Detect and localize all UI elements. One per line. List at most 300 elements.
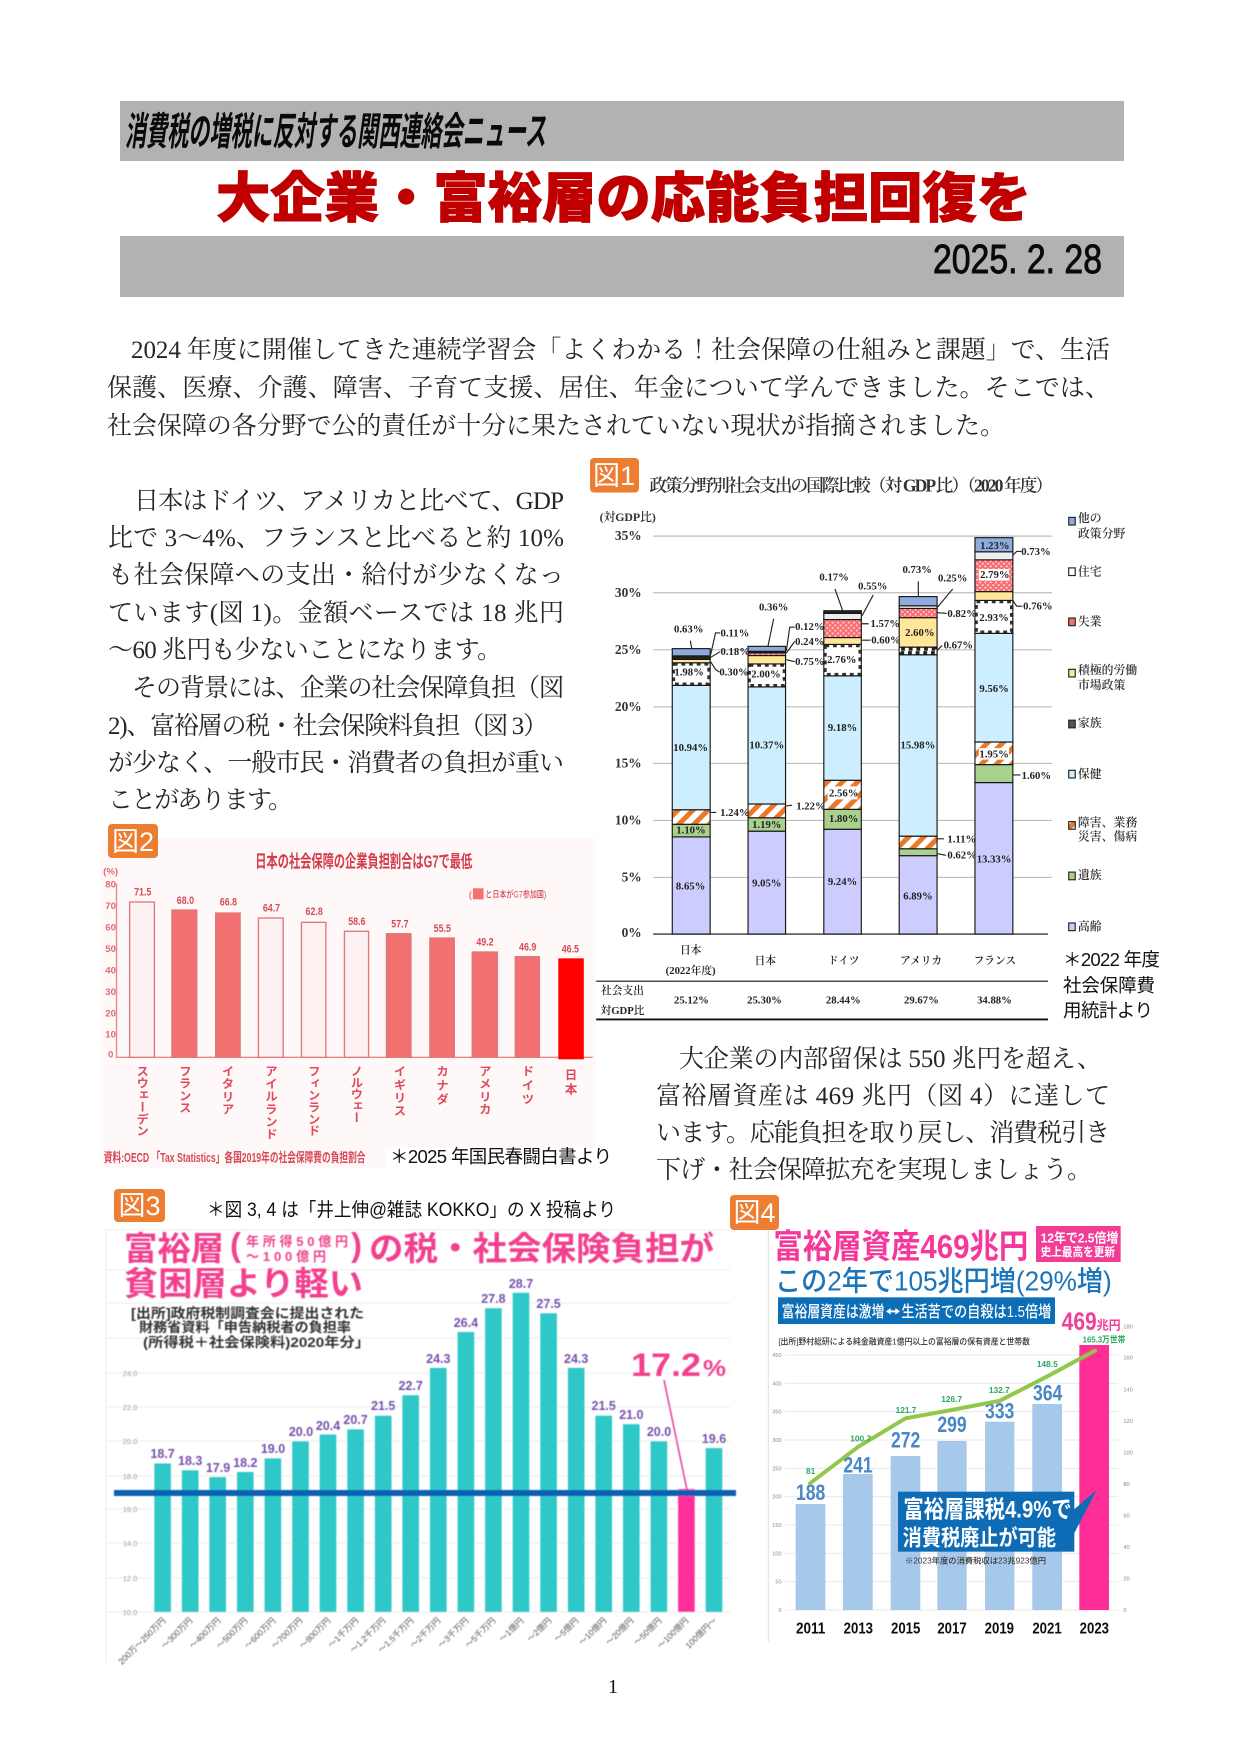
legend: 失業 xyxy=(1078,615,1102,629)
bar: Japan 2022 xyxy=(672,624,750,934)
grid and axes: 200 xyxy=(772,1495,782,1501)
bar values: 57.7 xyxy=(391,918,409,930)
bar values: 62.8 xyxy=(306,906,323,918)
bar: France: 2.93% xyxy=(979,612,1009,624)
callout: 富裕層課税4.9%で xyxy=(903,1496,1072,1523)
bar: Germany: 0.55% xyxy=(858,580,888,592)
x axis labels: 100億円〜 xyxy=(683,1615,719,1650)
bar values: 24.3 xyxy=(564,1352,588,1366)
country labels: フィンランド xyxy=(306,1065,320,1137)
chart grid xyxy=(106,1230,730,1663)
figure 2 source note: ＊2025 年国民春闘白書より xyxy=(390,1146,612,1167)
bar values: 20.0 xyxy=(647,1425,671,1439)
bars xyxy=(154,1293,722,1612)
bar: Germany: 9.24% xyxy=(828,876,857,888)
grid and axes: 450 xyxy=(772,1353,782,1359)
grid and axes: 400 xyxy=(772,1381,782,1387)
figure 1 title: 政策分野別社会支出の国際比較（対 GDP 比）（2020 年度） xyxy=(649,476,1053,496)
intro paragraph: 保護、医療、介護、障害、子育て支援、居住、年金について学んできました。そこでは、 xyxy=(107,374,1110,402)
x axis labels: 〜3千万円 xyxy=(436,1615,470,1650)
bar: USA: 6.89% xyxy=(903,890,933,902)
household values: 132.7 xyxy=(989,1385,1010,1395)
bar values: 188 xyxy=(796,1480,825,1505)
y axis labels: 24.0 xyxy=(123,1369,137,1378)
bars xyxy=(130,902,583,1059)
totals table: 社会支出 xyxy=(601,984,644,997)
bar values: 26.4 xyxy=(454,1316,478,1330)
grid and axes: 60 xyxy=(1123,1514,1130,1520)
totals table: 34.88% xyxy=(977,995,1012,1007)
right text block: 大企業の内部留保は 550 兆円を超え、 xyxy=(679,1045,1102,1073)
legend: ( xyxy=(469,890,473,901)
country labels: スウェーデン xyxy=(135,1065,149,1137)
y axis: 5% xyxy=(622,870,642,885)
y axis: 30 xyxy=(105,987,116,998)
bar values: 20.7 xyxy=(343,1413,368,1427)
y axis: 10 xyxy=(105,1030,116,1041)
date band: 2025. 2. 28 xyxy=(933,236,1102,282)
y axis labels: 10.0 xyxy=(123,1608,137,1617)
totals table: 対GDP比 xyxy=(601,1004,645,1017)
bar: Japan xyxy=(748,602,826,934)
year labels: 2013 xyxy=(844,1621,873,1638)
bar: USA xyxy=(899,564,977,934)
grid and axes: 120 xyxy=(1123,1419,1133,1425)
bar: Germany: 1.57% xyxy=(870,618,900,630)
legend: 遺族 xyxy=(1078,868,1102,882)
right text block xyxy=(656,1045,1110,1184)
blue banner: 富裕層資産は激増 xyxy=(782,1303,884,1321)
bar values: 49.2 xyxy=(476,937,494,949)
y axis: 35% xyxy=(615,528,642,543)
x axis labels: 〜300万円 xyxy=(159,1615,194,1650)
figure 1 source note: 社会保障費 xyxy=(1063,975,1155,996)
country labels: 日本 xyxy=(563,1068,577,1096)
bar: Japan: 0.75% xyxy=(795,656,825,668)
bar: USA: 0.82% xyxy=(947,608,977,620)
figure 3 badge: 図3 xyxy=(118,1191,161,1221)
figure 4 title: 富裕層資産469兆円 xyxy=(773,1229,1028,1266)
total label: 469 xyxy=(1062,1309,1097,1336)
x axis labels: 〜50億円 xyxy=(632,1615,663,1647)
grid and axes: 140 xyxy=(1123,1387,1133,1393)
bar: Germany: 2.76% xyxy=(827,654,857,666)
bar: USA: 1.11% xyxy=(947,833,976,845)
y axis labels: 16.0 xyxy=(123,1505,137,1514)
bar values: 18.2 xyxy=(233,1456,258,1470)
figure 1 source note: 用統計より xyxy=(1063,1000,1153,1021)
bars xyxy=(796,1345,1109,1610)
grid and axes: 150 xyxy=(772,1523,782,1529)
country labels: アメリカ xyxy=(477,1065,491,1115)
household values: 126.7 xyxy=(941,1394,962,1404)
bar values xyxy=(796,1381,1063,1505)
bar values: 19.0 xyxy=(261,1442,285,1456)
left text block: も社会保障への支出・給付が少なくなっ xyxy=(108,561,564,589)
source note xyxy=(131,1305,370,1350)
left text block: 2)、富裕層の税・社会保険料負担（図 3） xyxy=(108,712,548,740)
right text block: 富裕層資産は 469 兆円（図 4）に達して xyxy=(656,1082,1110,1110)
grid and axes: 0 xyxy=(1123,1608,1126,1614)
x axis labels: 〜5億円 xyxy=(552,1615,580,1644)
y axis: 70 xyxy=(105,901,116,912)
year labels: 2015 xyxy=(891,1621,921,1638)
y axis: 20% xyxy=(615,699,642,714)
right text block: 下げ・社会保障拡充を実現しましょう。 xyxy=(656,1156,1092,1184)
grid and axes: 250 xyxy=(772,1466,782,1472)
bar: Japan 2022: 1.98% xyxy=(674,666,704,678)
callout: 消費税廃止が可能 xyxy=(903,1526,1056,1551)
grid and axes: 160 xyxy=(1123,1356,1133,1362)
y axis labels xyxy=(123,1369,137,1617)
bar values: 19.6 xyxy=(702,1432,726,1446)
bar: France: 1.60% xyxy=(1022,770,1051,782)
figure 3 title: 〜100億円 xyxy=(246,1249,326,1264)
country labels: フランス xyxy=(177,1065,191,1113)
bar: Japan: 0.36% xyxy=(759,602,788,614)
bar values: 20.4 xyxy=(316,1419,340,1433)
bar values: 46.5 xyxy=(562,943,579,955)
source note: (所得税＋社会保険料)2020年分」 xyxy=(143,1334,370,1350)
grid and axes: 100 xyxy=(772,1551,782,1557)
right text block: います。応能負担を取り戻し、消費税引き xyxy=(656,1119,1110,1147)
grid and axes xyxy=(768,1230,1133,1642)
legend: 保健 xyxy=(1078,767,1102,781)
bar values: 58.6 xyxy=(348,916,365,928)
bar values: 24.3 xyxy=(426,1352,451,1366)
y axis: 30% xyxy=(615,585,642,600)
household values: 148.5 xyxy=(1037,1359,1058,1369)
bar values: 66.8 xyxy=(220,897,237,909)
bar: USA: 0.67% xyxy=(944,640,973,652)
17.2% callout xyxy=(631,1347,726,1490)
bar: Japan: 0.24% xyxy=(795,636,825,648)
legend: 家族 xyxy=(1078,716,1102,730)
x axis labels: 〜1千万円 xyxy=(326,1615,360,1650)
figure 3 title: の税・社会保険負担が xyxy=(369,1230,714,1267)
bar: USA: 0.25% xyxy=(938,573,967,585)
page number: 1 xyxy=(608,1676,618,1698)
bar values: 364 xyxy=(1033,1381,1063,1406)
bar: Germany: 0.17% xyxy=(819,572,849,584)
legend: 他の xyxy=(1078,511,1102,525)
y axis labels: 18.0 xyxy=(123,1472,137,1481)
bar values: 71.5 xyxy=(134,887,151,899)
household line xyxy=(810,1351,1095,1483)
intro paragraph: 2024 年度に開催してきた連続学習会「よくわかる！社会保障の仕組みと課題」で、生活 xyxy=(131,336,1110,364)
figure 3: tax burden by income bar chart xyxy=(106,1226,736,1667)
grid and axes: 350 xyxy=(772,1410,782,1416)
household values: 100.7 xyxy=(850,1434,871,1444)
x axis labels: 〜800万円 xyxy=(297,1615,332,1650)
x axis and country labels: アメリカ xyxy=(900,955,942,967)
y axis: 50 xyxy=(105,944,116,955)
bar: USA: 0.62% xyxy=(947,850,977,862)
x axis labels: 200万〜250万円 xyxy=(116,1615,167,1667)
y axis: 40 xyxy=(105,965,116,976)
bar: Japan: 0.12% xyxy=(795,621,825,633)
y axis: (%) xyxy=(103,866,118,877)
y axis labels: 14.0 xyxy=(123,1539,137,1548)
bar: USA: 2.60% xyxy=(905,627,935,639)
bar: Japan 2022: 0.63% xyxy=(674,624,703,636)
y axis xyxy=(103,866,593,1061)
x axis labels: 〜1.5千万円 xyxy=(376,1615,415,1655)
x axis and country labels xyxy=(653,934,1048,977)
bar: Japan 2022: 0.11% xyxy=(720,627,749,639)
grid and axes: 80 xyxy=(1123,1482,1130,1488)
intro paragraph xyxy=(107,336,1110,440)
bar values: 21.0 xyxy=(619,1408,644,1422)
country labels: カナダ xyxy=(434,1065,449,1105)
y axis: 15% xyxy=(615,756,642,771)
bar: France: 2.79% xyxy=(980,569,1010,581)
bar: Germany xyxy=(819,572,901,934)
household values xyxy=(806,1335,1125,1476)
figure 4 badge: 図4 xyxy=(733,1198,776,1228)
bar values: 333 xyxy=(985,1398,1014,1423)
country labels: ドイツ xyxy=(520,1065,534,1105)
figure 1 source note xyxy=(1063,949,1160,1021)
main title: 大企業・富裕層の応能負担回復を xyxy=(216,169,1031,229)
left text block: 〜60 兆円も少ないことになります。 xyxy=(108,636,502,664)
totals table: 28.44% xyxy=(826,995,861,1007)
x axis labels: 〜700万円 xyxy=(269,1615,304,1650)
callout note: ※2023年度の消費税収は23兆923億円 xyxy=(905,1555,1046,1565)
x axis labels: 〜2千万円 xyxy=(408,1615,442,1650)
country labels: ノルウェー xyxy=(349,1065,363,1123)
bar: Germany: 2.56% xyxy=(829,787,858,799)
figure 3 title: 貧困層より軽い xyxy=(124,1265,363,1302)
grid and axes: 20 xyxy=(1123,1576,1130,1582)
grid and axes: 0 xyxy=(779,1608,782,1614)
bar values: 21.5 xyxy=(592,1399,616,1413)
bar: Germany: 0.60% xyxy=(871,635,901,647)
totals table xyxy=(596,981,1048,1019)
legend: 住宅 xyxy=(1078,565,1102,579)
bar: Japan 2022: 0.18% xyxy=(720,646,750,658)
left text block: ことがあります。 xyxy=(108,787,293,814)
figure 2 title: 日本の社会保障の企業負担割合はG7で最低 xyxy=(255,851,472,871)
totals table: 25.30% xyxy=(747,995,782,1007)
country labels xyxy=(135,1065,577,1140)
x axis labels: 〜10億円 xyxy=(577,1615,608,1647)
country labels: アイルランド xyxy=(263,1065,278,1140)
bar values: 27.5 xyxy=(536,1297,561,1311)
legend: 高齢 xyxy=(1078,920,1102,934)
bar values: 272 xyxy=(891,1427,920,1452)
year labels: 2021 xyxy=(1032,1621,1062,1638)
legend: 障害、業務 xyxy=(1078,816,1137,830)
bar: Japan 2022: 1.24% xyxy=(720,807,750,819)
figure 3 title: 富裕層 xyxy=(124,1230,224,1267)
callout xyxy=(898,1490,1097,1552)
bar: Japan 2022: 0.30% xyxy=(719,666,749,678)
x axis and country labels: 日本 xyxy=(680,944,702,957)
bar: USA: 0.73% xyxy=(902,564,932,576)
blue banner xyxy=(778,1297,1055,1324)
year labels: 2023 xyxy=(1080,1621,1109,1638)
figure 3 title: 年所得50億円 xyxy=(246,1234,348,1249)
bar values: 20.0 xyxy=(289,1425,313,1439)
legend: 積極的労働 xyxy=(1078,663,1137,677)
x axis and country labels: フランス xyxy=(974,955,1016,967)
bar: France: 0.76% xyxy=(1023,601,1053,613)
legend xyxy=(1069,511,1137,934)
pink tag: 12年で2.5倍増 xyxy=(1041,1229,1118,1245)
bar: Japan: 10.37% xyxy=(749,740,784,752)
figure 4: wealth of the rich bar and line chart xyxy=(768,1226,1133,1642)
y axis: 0% xyxy=(622,925,642,940)
x axis labels: 〜100億円 xyxy=(655,1615,690,1650)
bar values: 55.5 xyxy=(434,923,451,935)
figure 3 title xyxy=(124,1226,714,1302)
figure 2: employer share of social security bar chart xyxy=(100,838,596,1168)
figure 1: stacked bar chart of social spending xyxy=(596,476,1137,1019)
grid and axes: 50 xyxy=(775,1580,782,1586)
y axis xyxy=(600,510,1052,940)
source: [出所]野村総研による純金融資産1億円以上の富裕層の保有資産と世帯数 xyxy=(778,1335,1030,1346)
y axis: 10% xyxy=(615,813,642,828)
country labels: イタリア xyxy=(220,1065,234,1115)
header band: newsletter name xyxy=(120,101,1124,161)
x axis labels: 〜1億円 xyxy=(497,1615,525,1644)
bar values xyxy=(134,887,579,955)
bar: Germany: 1.80% xyxy=(829,813,858,825)
x axis labels xyxy=(116,1615,719,1667)
bar values xyxy=(150,1277,726,1475)
year labels xyxy=(796,1621,1109,1638)
legend: 政策分野 xyxy=(1078,526,1125,540)
bar: France: 9.56% xyxy=(979,683,1009,695)
x axis labels: 〜400万円 xyxy=(187,1615,222,1650)
bar values: 17.9 xyxy=(206,1461,230,1475)
bar values: 64.7 xyxy=(263,902,280,914)
bar: France: 1.23% xyxy=(980,540,1010,552)
country labels: イギリス xyxy=(392,1065,406,1117)
left text block: その背景には、企業の社会保障負担（図 xyxy=(132,674,564,702)
bar: Japan: 2.00% xyxy=(751,669,781,681)
year labels: 2019 xyxy=(985,1621,1014,1638)
y axis labels: 12.0 xyxy=(123,1574,137,1583)
figure 3 and 4 credit note: ＊図 3, 4 は「井上伸@雑誌 KOKKO」の X 投稿より xyxy=(207,1199,616,1221)
y axis: 0 xyxy=(108,1050,113,1061)
y axis: 20 xyxy=(105,1008,116,1019)
x axis and country labels: ドイツ xyxy=(828,955,859,967)
total label: 兆円 xyxy=(1097,1318,1121,1332)
year labels: 2017 xyxy=(937,1621,967,1638)
legend: と日本がG7参加国) xyxy=(485,889,546,901)
bar: Japan 2022: 1.10% xyxy=(676,824,706,836)
household values: 81 xyxy=(806,1466,816,1476)
y axis labels: 20.0 xyxy=(123,1437,137,1446)
bar: France xyxy=(975,538,1053,934)
bar values: 22.7 xyxy=(399,1379,423,1393)
x axis labels: 〜20億円 xyxy=(604,1615,635,1647)
legend xyxy=(469,888,546,901)
y axis: 60 xyxy=(105,922,116,933)
bar values: 18.3 xyxy=(178,1454,202,1468)
source note: 財務省資料「申告納税者の負担率 xyxy=(139,1319,351,1335)
y axis: 25% xyxy=(615,642,642,657)
bar: Japan: 9.05% xyxy=(752,877,782,889)
blue reference line xyxy=(114,1490,736,1496)
x axis labels: 〜2億円 xyxy=(525,1615,553,1644)
totals table: 29.67% xyxy=(904,995,939,1007)
figure 3 title: ( xyxy=(230,1226,241,1263)
total label xyxy=(1062,1309,1121,1336)
bar values: 68.0 xyxy=(177,895,194,907)
17.2% callout: 17.2 xyxy=(631,1347,701,1383)
year labels: 2011 xyxy=(796,1621,826,1638)
bar: Japan: 1.22% xyxy=(796,800,826,812)
household values: 165.3万世帯 xyxy=(1083,1335,1125,1345)
bar values: 46.9 xyxy=(519,942,536,954)
left text block: 比で 3〜4%、フランスと比べると約 10% xyxy=(108,524,564,552)
figure 3 title: ) xyxy=(351,1226,362,1263)
bar: France: 13.33% xyxy=(977,854,1011,866)
left text block xyxy=(108,487,564,814)
grid and axes: 100 xyxy=(1123,1451,1133,1457)
header band: newsletter name: 消費税の増税に反対する関西連絡会ニュース xyxy=(125,111,547,154)
x axis labels: 〜5千万円 xyxy=(463,1615,497,1650)
bar: USA: 15.98% xyxy=(901,740,935,752)
figure 2 badge: 図2 xyxy=(112,827,154,857)
legend: 市場政策 xyxy=(1078,678,1125,692)
bar: Japan 2022: 10.94% xyxy=(673,742,708,754)
source: 資料:OECD 「Tax Statistics」各国2019年の社会保障費の負担割合 xyxy=(104,1149,366,1165)
y axis: (対GDP比) xyxy=(600,510,656,524)
bar: Japan: 1.19% xyxy=(752,819,782,831)
totals table: 25.12% xyxy=(674,995,709,1007)
date band xyxy=(120,236,1124,297)
source note: [出所]政府税制調査会に提出された xyxy=(131,1305,364,1321)
pink tag xyxy=(1036,1226,1121,1262)
figure 1 source note: ＊2022 年度 xyxy=(1063,949,1160,970)
bar values: 299 xyxy=(937,1412,967,1437)
bar: France: 0.73% xyxy=(1021,546,1051,558)
x axis and country labels: (2022年度) xyxy=(666,964,716,977)
figure 1 badge: 図1 xyxy=(593,461,635,491)
bar values: 27.8 xyxy=(481,1292,506,1306)
bar: Germany: 9.18% xyxy=(828,722,857,734)
grid and axes: 40 xyxy=(1123,1545,1130,1551)
blue banner: 生活苦での自殺は1.5倍増 xyxy=(901,1303,1051,1321)
bar values: 21.5 xyxy=(371,1399,395,1413)
bar values: 18.7 xyxy=(150,1447,175,1461)
y axis labels: 22.0 xyxy=(123,1403,137,1412)
grid and axes: 300 xyxy=(772,1438,782,1444)
intro paragraph: 社会保障の各分野で公的責任が十分に果たされていない現状が指摘されました。 xyxy=(107,412,1005,440)
bar: France: 1.95% xyxy=(979,749,1009,761)
grid and axes: 180 xyxy=(1123,1325,1133,1331)
left text block: ています(図 1)。金額ベースでは 18 兆円 xyxy=(108,599,564,627)
x axis and country labels: 日本 xyxy=(755,954,776,967)
bar values: 241 xyxy=(843,1452,873,1477)
x axis labels: 〜1.2千万円 xyxy=(348,1615,387,1655)
y axis: 80 xyxy=(105,880,116,891)
x axis labels: 〜600万円 xyxy=(242,1615,277,1650)
left text block: が少なく、一般市民・消費者の負担が重い xyxy=(108,749,564,777)
x axis labels: 〜500万円 xyxy=(214,1615,249,1650)
17.2% callout: % xyxy=(703,1355,726,1381)
bar values: 28.7 xyxy=(509,1277,533,1291)
bar: Japan 2022: 8.65% xyxy=(676,880,705,892)
left text block: 日本はドイツ、アメリカと比べて、GDP xyxy=(134,487,564,515)
pink tag: 史上最高を更新 xyxy=(1041,1244,1115,1259)
blue subtitle: この2年で105兆円増(29%増) xyxy=(775,1265,1112,1296)
household values: 121.7 xyxy=(896,1405,917,1415)
